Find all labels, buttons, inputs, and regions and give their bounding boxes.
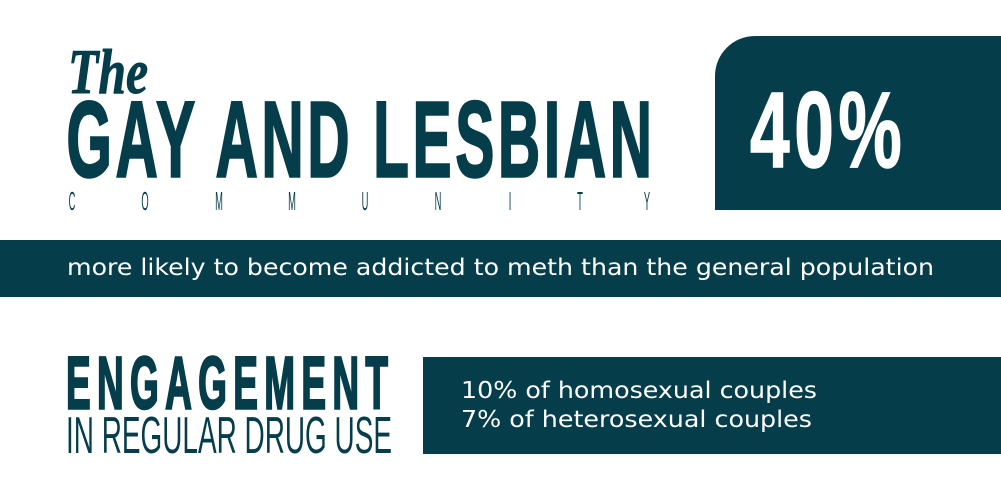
title: community: C: [69, 187, 75, 217]
panel: banner: [0, 240, 1001, 297]
title: community: O: [141, 187, 149, 217]
stat line: heterosexual couples: 7% of heterosexual couples: [461, 407, 812, 433]
title: community: U: [362, 187, 368, 217]
title: community: M: [288, 187, 296, 217]
subheading: in regular drug use: IN REGULAR DRUG USE: [66, 407, 392, 465]
title: community: M: [215, 187, 223, 217]
title: The: The: [68, 36, 148, 107]
title: gay and lesbian: GAY AND LESBIAN: [66, 79, 652, 200]
panel: couples statistics: [423, 357, 1001, 454]
stat: 40%: 40%: [750, 70, 902, 191]
title: community: I: [509, 187, 511, 217]
title: community: T: [577, 187, 583, 217]
title: community: Y: [644, 187, 650, 217]
heading: engagement: ENGAGEMENT: [66, 343, 388, 425]
title: community: N: [435, 187, 441, 217]
title: community: [69, 187, 650, 217]
stat line: homosexual couples: 10% of homosexual couples: [461, 378, 817, 404]
banner text: more likely to become addicted to meth than the general population: [67, 255, 934, 281]
panel: 40% callout: [715, 36, 1001, 210]
